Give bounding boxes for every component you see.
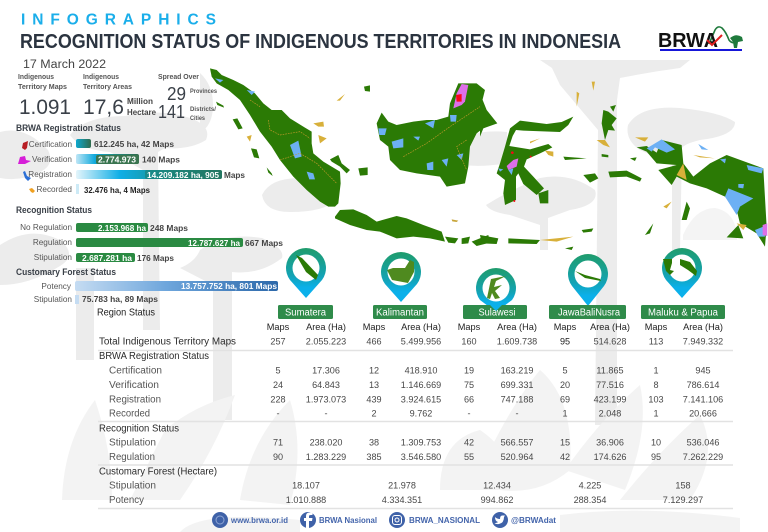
table: region status: 1.309.753 [401, 438, 441, 448]
panel: BRWA registration status: BRWA Registration Status [16, 123, 121, 133]
table: region status: 1 [653, 366, 659, 376]
table: region status: Maps [554, 322, 577, 332]
table: region status: Verification [109, 380, 159, 391]
panel: BRWA registration status: 140 Maps [142, 154, 180, 164]
table: region status: 13 [369, 380, 379, 390]
table: region status: Area (Ha) [497, 322, 537, 332]
table: region status: 1 [653, 408, 659, 418]
table: region status: 238.020 [310, 438, 342, 448]
panel: customary forest status: 75.783 ha, 89 Maps [82, 294, 158, 304]
table: region status: 158 [675, 480, 691, 490]
table: region status: 12 [369, 366, 379, 376]
table: region status: Customary Forest (Hectare) [99, 466, 217, 478]
panel: recognition status: 248 Maps [150, 223, 188, 233]
table: region status: 466 [366, 336, 382, 346]
table: region status: 7.949.332 [683, 336, 723, 346]
table: region status: 1.283.229 [306, 452, 346, 462]
table: region status: 423.199 [594, 394, 626, 404]
table: region status: 1.010.888 [286, 495, 326, 505]
footer: social links [212, 512, 556, 528]
stats block: Indigenous [18, 72, 54, 81]
footer: social links: BRWA Nasional [319, 516, 377, 525]
panel: BRWA registration status: Registration [28, 170, 72, 179]
pin tip over Sulawesi label [490, 305, 502, 311]
table: region status: 4.225 [579, 480, 601, 490]
table: region status: 1.146.669 [401, 380, 441, 390]
table: region status: 1.973.073 [306, 394, 346, 404]
table: region status: 520.964 [501, 452, 533, 462]
stats block: Million [127, 96, 153, 106]
table: region status: 2.055.223 [306, 336, 346, 346]
table: region status: 385 [366, 452, 382, 462]
stats block: Cities [190, 115, 205, 122]
logo: BRWA: BRWA [658, 30, 718, 52]
table: region status: Total Indigenous Territory Maps [99, 336, 236, 348]
table: region status: 747.188 [501, 394, 533, 404]
table: region status: 42 [464, 438, 474, 448]
table: region status: 95 [560, 336, 570, 346]
panel: BRWA registration status [16, 123, 245, 195]
stats block: Spread Over [158, 72, 199, 81]
table: region status: 55 [464, 452, 474, 462]
stats block: 1.091 [19, 96, 71, 119]
stats block: Provinces [190, 88, 217, 95]
table: region status: 10 [651, 438, 661, 448]
table: region status: 514.628 [594, 336, 626, 346]
panel: customary forest status: Potency [41, 282, 72, 291]
table: region status: 69 [560, 394, 570, 404]
panel: BRWA registration status: 612.245 ha, 42 Maps [94, 139, 174, 149]
logo: BRWA [658, 27, 743, 52]
map pin: Maluku and Papua [662, 248, 702, 298]
table: region status: 21.978 [388, 480, 416, 490]
stats block: 17,6 [83, 96, 124, 119]
table: region status: Stipulation [109, 480, 156, 492]
table: region status: Area (Ha) [590, 322, 630, 332]
date: 17 March 2022 [23, 59, 106, 71]
stats block: 29 [167, 84, 186, 104]
table: region status: 2.048 [599, 408, 621, 418]
table: region status: 20.666 [689, 408, 717, 418]
table: region status: Maps [267, 322, 290, 332]
table: region status: 113 [649, 336, 663, 346]
map: Papua [637, 140, 767, 247]
heading: infographics: INFOGRAPHICS [21, 12, 216, 28]
table: region status: 9.762 [410, 408, 432, 418]
table: region status: Maps [458, 322, 481, 332]
table: region status: 66 [464, 394, 474, 404]
panel: BRWA registration status: 14.209.182 ha, 905 [147, 170, 219, 180]
title: RECOGNITION STATUS OF INDIGENOUS TERRITORIES IN INDONESIA [20, 31, 621, 53]
table: region status: 19 [464, 366, 474, 376]
panel: BRWA registration status: 2.774.973 [98, 154, 136, 164]
table: region status: 20 [560, 380, 570, 390]
heading: region status: Region Status [97, 306, 155, 318]
table: region status: Potency [109, 495, 144, 506]
map: Sulawesi and Maluku [480, 82, 767, 250]
table: region status: 945 [695, 366, 711, 376]
panel: recognition status: 2.153.968 ha [98, 223, 146, 233]
panel: recognition status: Stipulation [34, 253, 72, 262]
table: region status: Registration [109, 394, 161, 406]
table: region status: 439 [366, 394, 382, 404]
panel: customary forest status: 13.757.752 ha, 801 Maps [181, 281, 277, 291]
region label: Kalimantan: Kalimantan [376, 308, 424, 318]
table: region status: 994.862 [481, 495, 513, 505]
region label: Maluku and Papua [641, 305, 725, 319]
table: region status: 7.141.106 [683, 394, 723, 404]
panel: BRWA registration status: Verification [32, 155, 72, 164]
region label: Sumatera: Sumatera [285, 308, 326, 318]
region label: JawaBaliNusra [549, 305, 626, 319]
table: region status: 12.434 [483, 480, 511, 490]
table: region status: 786.614 [687, 380, 719, 390]
table: region status: 5 [562, 366, 568, 376]
table: region status: Recognition Status [99, 424, 179, 434]
footer: social links: BRWA_NASIONAL [409, 516, 480, 525]
table: region status: 257 [270, 336, 286, 346]
table: region status: 2 [371, 408, 377, 418]
map pin: Sumatera [286, 248, 326, 298]
table: region status: 699.331 [501, 380, 533, 390]
table: region status: Area (Ha) [683, 322, 723, 332]
table: region status: 3.924.615 [401, 394, 441, 404]
table: region status: 15 [560, 438, 570, 448]
panel: recognition status: 176 Maps [137, 253, 174, 263]
panel: recognition status [16, 205, 283, 263]
panel: recognition status: 667 Maps [245, 238, 283, 248]
panel: customary forest status: Stipulation [34, 295, 72, 304]
table: region status: - [467, 408, 471, 418]
table: region status: 163.219 [501, 366, 533, 376]
table: region status: 75 [464, 380, 474, 390]
table: region status: 566.557 [501, 438, 533, 448]
table: region status: 77.516 [596, 380, 624, 390]
table: region status: 1 [562, 408, 568, 418]
table: region status: BRWA Registration Status [99, 351, 209, 362]
table: region status: 3.546.580 [401, 452, 441, 462]
region label: Sulawesi: Sulawesi [478, 308, 516, 318]
table: region status: 8 [653, 380, 659, 390]
icon: website [212, 512, 228, 528]
stats block: Territory Areas [83, 82, 132, 91]
map pin: JawaBaliNusra [568, 254, 608, 306]
background tree silhouettes [0, 60, 737, 425]
table: region status: Regulation [109, 452, 155, 463]
region label: Sulawesi [463, 305, 527, 319]
table: region status: 288.354 [574, 495, 606, 505]
icon: instagram [389, 512, 405, 528]
map: Java and Bali-Nusa [335, 209, 490, 246]
stats block: Indigenous [83, 72, 119, 81]
stats block: Districts/ [190, 106, 216, 113]
stats block: 141 [158, 102, 185, 122]
table: region status: 17.306 [312, 366, 340, 376]
footer: social links: www.brwa.or.id [230, 516, 288, 525]
panel: BRWA registration status: 32.476 ha, 4 Maps [84, 185, 150, 195]
stats block: Hectare [127, 107, 156, 117]
panel: recognition status: No Regulation [20, 223, 72, 232]
map: Kalimantan [377, 83, 489, 187]
table: region status: - [324, 408, 328, 418]
panel: recognition status: 2.687.281 ha [82, 253, 132, 263]
table: region status: 42 [560, 452, 570, 462]
table: region status: - [276, 408, 280, 418]
table: region status: 95 [651, 452, 661, 462]
icon: verification [18, 156, 31, 164]
table: region status: 228 [270, 394, 286, 404]
background leaves [62, 370, 740, 532]
table: region status: 36.906 [596, 438, 624, 448]
table: region status: 174.626 [594, 452, 626, 462]
table: region status: 11.865 [596, 366, 624, 376]
panel: BRWA registration status: Maps [224, 170, 245, 180]
icon: facebook [300, 512, 316, 528]
map pin: Kalimantan [381, 252, 421, 302]
map: Sumatra and western islands [210, 68, 370, 207]
table: region status: Maps [363, 322, 386, 332]
table: region status: 418.910 [405, 366, 437, 376]
table: region status: 160 [461, 336, 477, 346]
region label: JawaBaliNusra: JawaBaliNusra [558, 308, 620, 318]
table: region status: 1.609.738 [497, 336, 537, 346]
table: region status: 5 [275, 366, 281, 376]
icon: certification [22, 141, 28, 150]
region label: Maluku and Papua: Maluku & Papua [648, 308, 718, 318]
panel: recognition status: Regulation [33, 238, 72, 247]
table: region status: 103 [648, 394, 664, 404]
icon: registration [23, 171, 31, 181]
region label: Sumatera [278, 305, 333, 319]
table: region status: Area (Ha) [306, 322, 346, 332]
icon: recorded [29, 188, 35, 193]
table: region status: 7.262.229 [683, 452, 723, 462]
panel: customary forest status [16, 267, 278, 304]
footer: social links: @BRWAdat [511, 516, 556, 525]
panel: BRWA registration status: Recorded [36, 185, 72, 194]
table: region status: 536.046 [687, 438, 719, 448]
table: region status: 18.107 [292, 480, 320, 490]
table: region status: Maps [645, 322, 668, 332]
table: region status: 7.129.297 [663, 495, 703, 505]
table: region status: 64.843 [312, 380, 340, 390]
table: region status: Certification [109, 366, 162, 376]
table: region status: - [515, 408, 519, 418]
panel: recognition status: Recognition Status [16, 205, 92, 215]
icon: twitter [492, 512, 508, 528]
table: region status: 71 [273, 438, 283, 448]
map pin: Sulawesi [476, 268, 516, 312]
table: region status: 4.334.351 [382, 495, 422, 505]
table: region status: Area (Ha) [401, 322, 441, 332]
stats block [18, 72, 217, 122]
table: region status: Stipulation [109, 438, 156, 448]
table: region status: 38 [369, 438, 379, 448]
table: region status: 5.499.956 [401, 336, 441, 346]
stats block: Territory Maps [18, 82, 67, 91]
panel: BRWA registration status: Certification [29, 140, 72, 149]
table: region status: Recorded [109, 408, 150, 420]
table: region status [97, 306, 733, 508]
table: region status: 90 [273, 452, 283, 462]
table: region status: 24 [273, 380, 283, 390]
panel: recognition status: 12.787.627 ha [188, 238, 240, 248]
panel: customary forest status: Customary Forest Status [16, 267, 116, 277]
